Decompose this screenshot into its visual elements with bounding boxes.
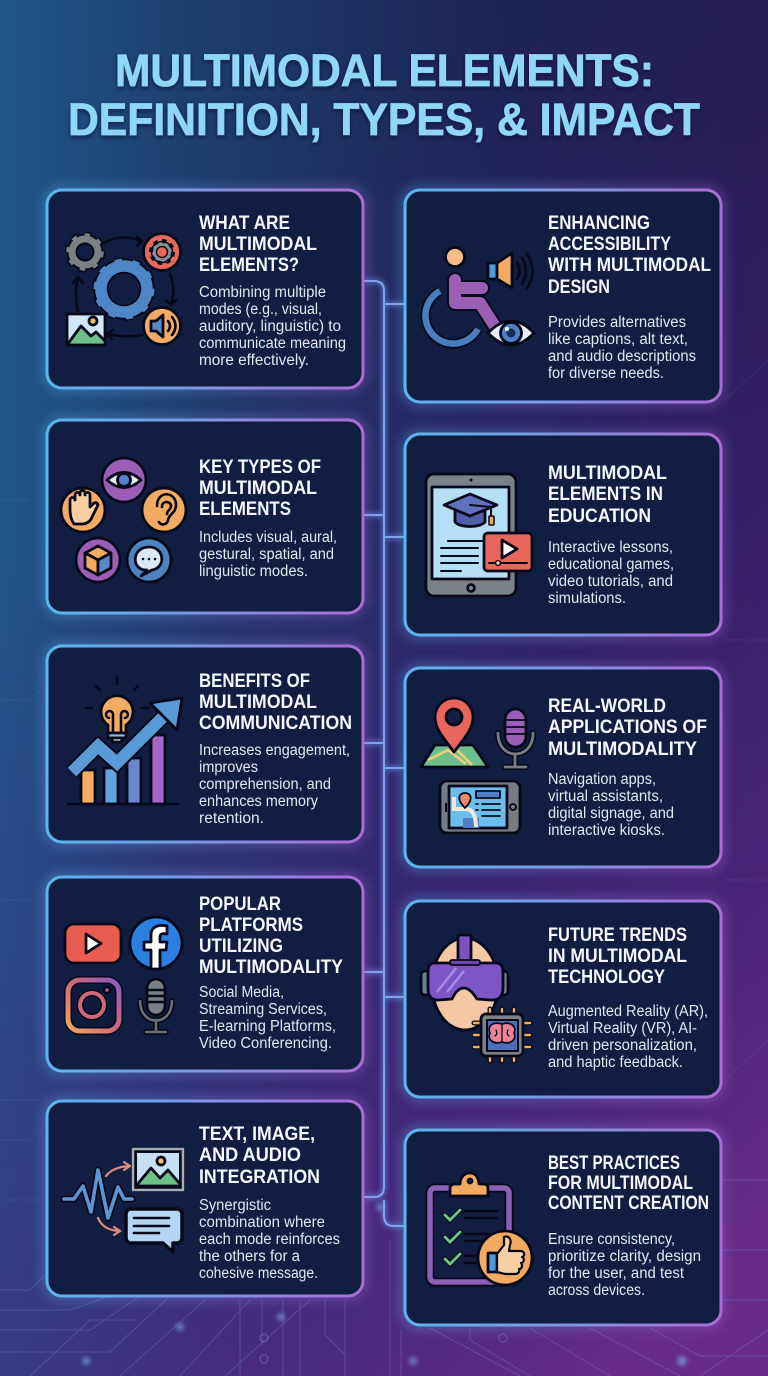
icon: five mode circles bbox=[61, 458, 186, 582]
icon: clipboard checklist with thumbs up bbox=[430, 1173, 532, 1285]
text: key types: ELEMENTS bbox=[199, 499, 291, 520]
text: real-world applications: APPLICATIONS OF bbox=[548, 717, 707, 738]
text: real-world applications: Navigation apps, bbox=[548, 771, 656, 788]
text: education: EDUCATION bbox=[548, 506, 651, 527]
text: key types: gestural, spatial, and bbox=[199, 546, 334, 563]
text: text image audio integration: INTEGRATION bbox=[199, 1167, 320, 1188]
text: what are multimodal elements bbox=[199, 213, 346, 369]
panel: benefits bbox=[47, 646, 363, 842]
text: benefits: comprehension, and bbox=[199, 776, 331, 793]
text: education: ELEMENTS IN bbox=[548, 484, 663, 505]
panel: best practices bbox=[405, 1130, 721, 1325]
text: best practices: prioritize clarity, design bbox=[548, 1248, 701, 1265]
panel: future trends bbox=[405, 901, 721, 1097]
text: enhancing accessibility: DESIGN bbox=[548, 277, 610, 298]
text: benefits bbox=[199, 671, 352, 827]
text: education: educational games, bbox=[548, 556, 674, 573]
panel: what are multimodal elements bbox=[47, 190, 363, 388]
text: future trends: driven personalization, bbox=[548, 1037, 697, 1054]
icon: rising chart with light bulb bbox=[68, 677, 182, 804]
connector lines bbox=[364, 281, 404, 1226]
text: future trends: Augmented Reality (AR), bbox=[548, 1003, 708, 1020]
icon: VR headset and AI chip bbox=[421, 935, 530, 1061]
panel: real-world applications bbox=[405, 668, 721, 867]
text: popular platforms: PLATFORMS bbox=[199, 915, 303, 936]
text: education: Interactive lessons, bbox=[548, 539, 673, 556]
text: what are multimodal elements: ELEMENTS? bbox=[199, 255, 299, 276]
text: popular platforms bbox=[199, 894, 343, 1052]
text: enhancing accessibility bbox=[548, 213, 711, 382]
text: benefits: enhances memory bbox=[199, 793, 318, 810]
text: education: MULTIMODAL bbox=[548, 463, 667, 484]
text: real-world applications: interactive kiosks. bbox=[548, 822, 665, 839]
text: education bbox=[548, 463, 674, 607]
text: education: simulations. bbox=[548, 590, 626, 607]
text: future trends: FUTURE TRENDS bbox=[548, 925, 687, 946]
text: future trends bbox=[548, 925, 708, 1071]
panel: text image audio integration bbox=[47, 1101, 363, 1296]
text: best practices: BEST PRACTICES bbox=[548, 1153, 680, 1174]
text: benefits: MULTIMODAL bbox=[199, 692, 317, 713]
text: benefits: COMMUNICATION bbox=[199, 713, 352, 734]
text: what are multimodal elements: WHAT ARE bbox=[199, 213, 290, 234]
text: enhancing accessibility: WITH MULTIMODAL bbox=[548, 255, 711, 276]
text: future trends: TECHNOLOGY bbox=[548, 967, 665, 988]
text: text image audio integration: cohesive message. bbox=[199, 1265, 318, 1282]
panel: key types bbox=[47, 420, 363, 613]
text: enhancing accessibility: Provides alternatives bbox=[548, 314, 686, 331]
icon: platform logos bbox=[65, 917, 182, 1032]
icon: wheelchair user with speaker and eye bbox=[425, 248, 534, 345]
text: text image audio integration: AND AUDIO bbox=[199, 1145, 301, 1166]
text: text image audio integration bbox=[199, 1124, 340, 1282]
panel: enhancing accessibility bbox=[405, 190, 721, 402]
text: future trends: and haptic feedback. bbox=[548, 1054, 683, 1071]
text: enhancing accessibility: ACCESSIBILITY bbox=[548, 234, 671, 255]
text: text image audio integration: TEXT, IMAGE, bbox=[199, 1124, 315, 1145]
text: what are multimodal elements: auditory, linguistic) to bbox=[199, 318, 341, 335]
text: enhancing accessibility: like captions, alt text, bbox=[548, 331, 688, 348]
title: DEFINITION, TYPES, & IMPACT bbox=[68, 94, 700, 145]
icon: map pin, microphone and kiosk bbox=[421, 698, 533, 833]
text: popular platforms: MULTIMODALITY bbox=[199, 957, 343, 978]
text: benefits: improves bbox=[199, 759, 258, 776]
text: real-world applications bbox=[548, 696, 707, 839]
text: real-world applications: REAL-WORLD bbox=[548, 696, 666, 717]
icon: waveform, image and message bbox=[64, 1149, 183, 1252]
text: best practices: Ensure consistency, bbox=[548, 1231, 675, 1248]
title bbox=[68, 45, 700, 145]
text: benefits: BENEFITS OF bbox=[199, 671, 310, 692]
text: real-world applications: digital signage, and bbox=[548, 805, 674, 822]
text: what are multimodal elements: MULTIMODAL bbox=[199, 234, 317, 255]
icon: tablet with graduation cap and video bbox=[426, 474, 532, 596]
text: popular platforms: Streaming Services, bbox=[199, 1001, 327, 1018]
icon: gears and modes cycle bbox=[67, 234, 180, 345]
text: popular platforms: Video Conferencing. bbox=[199, 1035, 332, 1052]
text: best practices: CONTENT CREATION bbox=[548, 1193, 709, 1214]
text: what are multimodal elements: Combining multiple bbox=[199, 284, 326, 301]
text: popular platforms: POPULAR bbox=[199, 894, 281, 915]
text: real-world applications: virtual assistants, bbox=[548, 788, 663, 805]
text: enhancing accessibility: for diverse needs. bbox=[548, 365, 664, 382]
panel: education bbox=[405, 434, 721, 635]
text: key types bbox=[199, 457, 337, 580]
text: key types: Includes visual, aural, bbox=[199, 529, 337, 546]
text: text image audio integration: Synergistic bbox=[199, 1197, 271, 1214]
text: text image audio integration: the others for a bbox=[199, 1248, 300, 1265]
text: enhancing accessibility: and audio descriptions bbox=[548, 348, 696, 365]
text: future trends: IN MULTIMODAL bbox=[548, 946, 687, 967]
text: popular platforms: Social Media, bbox=[199, 984, 284, 1001]
text: what are multimodal elements: communicate meaning bbox=[199, 335, 346, 352]
text: key types: MULTIMODAL bbox=[199, 478, 317, 499]
text: future trends: Virtual Reality (VR), AI- bbox=[548, 1020, 697, 1037]
text: benefits: Increases engagement, bbox=[199, 742, 350, 759]
panel: popular platforms bbox=[47, 877, 363, 1071]
text: best practices: FOR MULTIMODAL bbox=[548, 1173, 693, 1194]
text: best practices bbox=[548, 1153, 709, 1299]
text: text image audio integration: each mode reinforces bbox=[199, 1231, 340, 1248]
text: best practices: across devices. bbox=[548, 1282, 645, 1299]
text: key types: KEY TYPES OF bbox=[199, 457, 321, 478]
text: education: video tutorials, and bbox=[548, 573, 673, 590]
text: best practices: for the user, and test bbox=[548, 1265, 685, 1282]
text: text image audio integration: combination where bbox=[199, 1214, 325, 1231]
text: popular platforms: E-learning Platforms, bbox=[199, 1018, 336, 1035]
text: what are multimodal elements: more effectively. bbox=[199, 352, 309, 369]
text: what are multimodal elements: modes (e.g., visual, bbox=[199, 301, 322, 318]
text: real-world applications: MULTIMODALITY bbox=[548, 739, 697, 760]
text: popular platforms: UTILIZING bbox=[199, 936, 283, 957]
text: key types: linguistic modes. bbox=[199, 563, 308, 580]
text: enhancing accessibility: ENHANCING bbox=[548, 213, 650, 234]
title: MULTIMODAL ELEMENTS: bbox=[115, 45, 654, 96]
text: benefits: retention. bbox=[199, 810, 264, 827]
